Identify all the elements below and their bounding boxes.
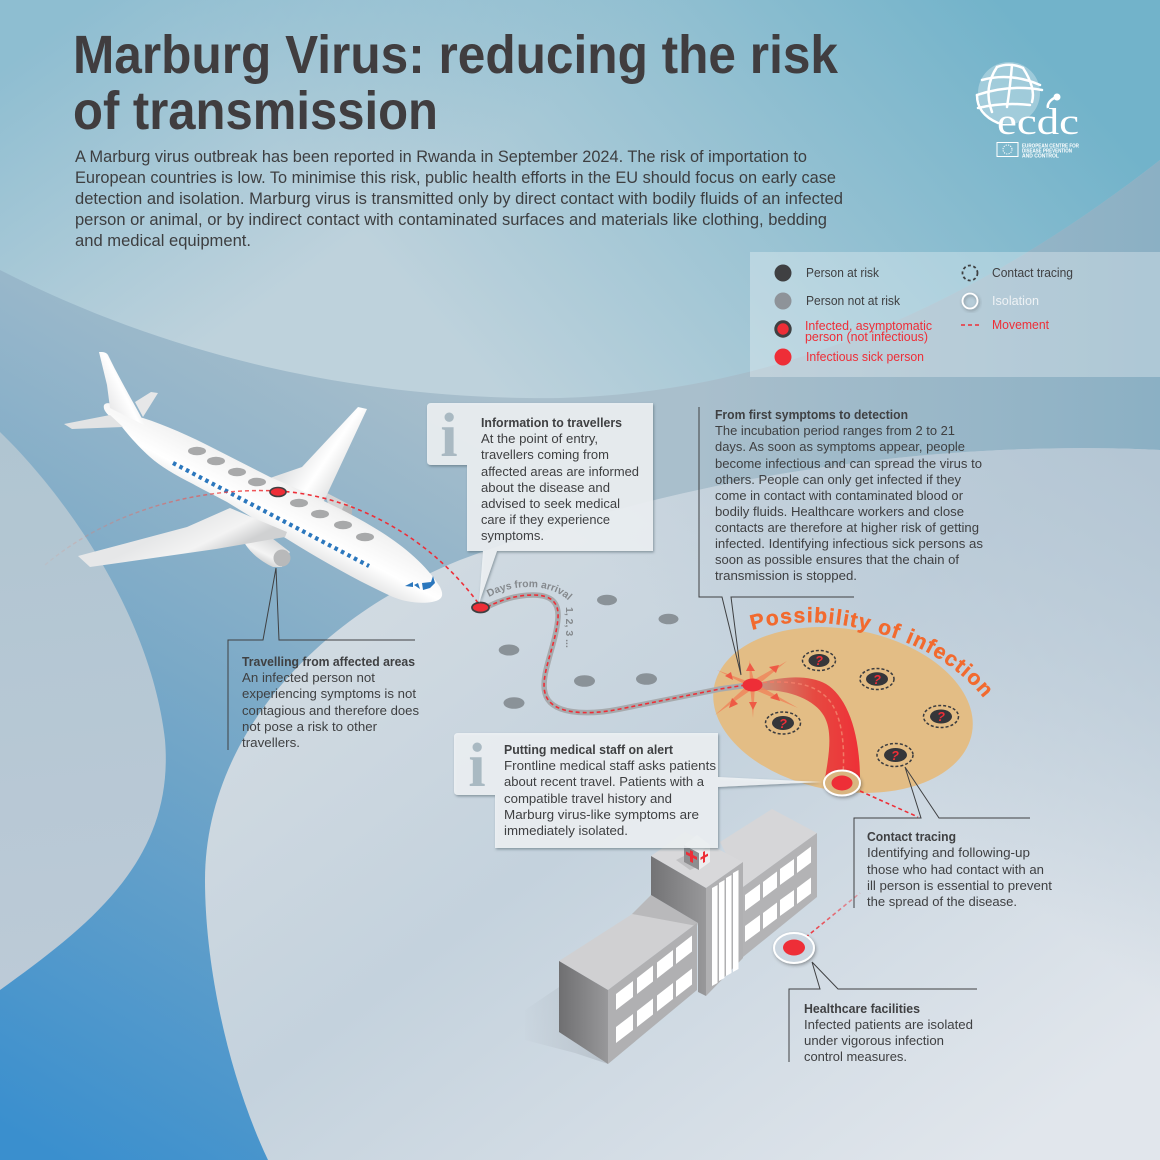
- text: contact tracing: ill person is essential to prevent: [867, 879, 1053, 893]
- text: healthcare facilities: control measures.: [804, 1050, 907, 1064]
- icon: info: i: [468, 732, 486, 800]
- text: information: At the point of entry,: [481, 432, 598, 446]
- text: from first symptoms to detection: bodily fluids. Healthcare workers and close: [715, 505, 964, 519]
- text: healthcare facilities: Healthcare facilities: [804, 1002, 920, 1016]
- text: from first symptoms to detection: The incubation period ranges from 2 to 21: [715, 424, 955, 438]
- fuselage: [104, 403, 442, 603]
- ecdc logo: EUROPEAN CENTRE FOR: [1022, 144, 1079, 150]
- right stabiliser: [135, 392, 158, 417]
- label: days from arrival: Days from arrival: [486, 580, 573, 600]
- text: from first symptoms to detection: [715, 408, 983, 583]
- text: healthcare facilities: [804, 1002, 973, 1064]
- text: healthcare facilities: under vigorous infection: [804, 1034, 944, 1048]
- contact: [924, 706, 958, 728]
- ecdc logo: ecdc: [997, 102, 1079, 143]
- movement line to hospital: [800, 893, 860, 942]
- flight path faded: [45, 491, 278, 565]
- legend: contact tracing: Contact tracing: [992, 266, 1073, 280]
- icon: info: i: [440, 402, 458, 470]
- upper engine: [325, 492, 352, 520]
- grey people not at risk: [499, 595, 678, 709]
- left stabiliser: [64, 415, 123, 429]
- text: travelling from affected areas: contagious and therefore does: [242, 704, 419, 718]
- text: from first symptoms to detection: From first symptoms to detection: [715, 408, 908, 422]
- tower strips: [712, 870, 738, 986]
- title: Marburg Virus: reducing the risk: [73, 25, 839, 85]
- legend: movement: [961, 318, 1049, 332]
- text: from first symptoms to detection: infected. Identifying infectious sick persons as: [715, 537, 983, 551]
- text: information: travellers coming from: [481, 448, 609, 462]
- text: putting medical staff: Putting medical staff on alert: [504, 743, 674, 757]
- contact: [877, 744, 913, 766]
- legend: person not at risk: [774, 292, 901, 310]
- callout: information to travellers: [427, 402, 653, 603]
- intro text: person or animal, or by indirect contact with contaminated surfaces and materials like clothing, bedding: [75, 211, 827, 229]
- contact: ?: [937, 709, 945, 724]
- text: travelling from affected areas: travellers.: [242, 736, 300, 750]
- text: from first symptoms to detection: come in contact with contaminated blood or: [715, 489, 963, 503]
- flight path to arrival: [278, 491, 481, 607]
- text: travelling from affected areas: An infected person not: [242, 671, 376, 685]
- intro text: European countries is low. To minimise this risk, public health efforts in the EU should focus on early case: [75, 169, 836, 187]
- legend: infected asymptomatic: Infected, asymptomatic: [805, 319, 932, 333]
- ecdc logo: [977, 62, 1079, 160]
- arrow heads: [725, 663, 780, 710]
- contact: [802, 650, 836, 670]
- legend: person at risk: Person at risk: [806, 266, 880, 280]
- text: healthcare facilities: Infected patients are isolated: [804, 1018, 973, 1032]
- text: information: about the disease and: [481, 481, 610, 495]
- lower wing: [78, 508, 287, 567]
- contact: [860, 668, 894, 690]
- legend: infected asymptomatic: [776, 319, 932, 344]
- legend: person at risk: [774, 264, 880, 282]
- isolation ring on tube: [824, 770, 860, 796]
- label: possibility of infection: Possibility of infection: [750, 606, 990, 698]
- windows row: [173, 463, 369, 566]
- ecdc logo: AND CONTROL: [1022, 154, 1059, 160]
- legend: infectious sick person: Infectious sick person: [806, 350, 924, 364]
- text: putting medical staff: immediately isolated.: [504, 824, 628, 838]
- contact: ?: [779, 716, 787, 731]
- leader: travelling: [228, 568, 415, 750]
- text: information: Information to travellers: [481, 416, 622, 430]
- text: information: advised to seek medical: [481, 497, 620, 511]
- dashed route in tube: [756, 682, 844, 775]
- legend: person not at risk: Person not at risk: [806, 294, 901, 308]
- roof hatches: [188, 447, 374, 541]
- contacts at risk: [766, 650, 958, 766]
- label: day numbers: 1, 2, 3 ...: [563, 607, 575, 648]
- text: information: care if they experience: [481, 513, 610, 527]
- hospital isolation ring: [774, 933, 814, 963]
- panel: legend: [750, 252, 1160, 377]
- intro text: A Marburg virus outbreak has been reported in Rwanda in September 2024. The risk of importation to: [75, 148, 807, 166]
- airplane: [64, 352, 442, 603]
- title: of transmission: [73, 81, 438, 141]
- text: travelling from affected areas: [242, 655, 419, 750]
- text: from first symptoms to detection: soon as possible ensures that the chain of: [715, 553, 960, 567]
- legend: infected asymptomatic: person (not infectious): [805, 330, 928, 344]
- leader: contact tracing: [854, 767, 1030, 908]
- tower: [651, 832, 743, 888]
- text: information: affected areas are informed: [481, 465, 639, 479]
- text: travelling from affected areas: not pose a risk to other: [242, 720, 377, 734]
- hospital: [525, 809, 817, 1064]
- intro text: detection and isolation. Marburg virus is transmitted only by direct contact with bodily fluids of an infected: [75, 190, 843, 208]
- right wing: [720, 809, 817, 887]
- contact: ?: [815, 653, 823, 668]
- infected passenger: [270, 488, 286, 496]
- windows right wing: [745, 846, 811, 942]
- text: contact tracing: Contact tracing: [867, 830, 956, 844]
- source case: [742, 678, 762, 692]
- text: putting medical staff: Frontline medical staff asks patients: [504, 759, 716, 773]
- title: [73, 25, 839, 141]
- text: from first symptoms to detection: others. People can only get infected if they: [715, 473, 962, 487]
- lower engine: [244, 535, 290, 567]
- contact: ?: [873, 672, 881, 687]
- legend: isolation: Isolation: [992, 294, 1039, 308]
- contact: [766, 712, 800, 734]
- left wing: [559, 911, 697, 990]
- callout: putting medical staff on alert: [454, 732, 822, 848]
- dashed route: [487, 595, 752, 713]
- tail fin: [99, 352, 146, 426]
- text: from first symptoms to detection: days. As soon as symptoms appear, people: [715, 440, 965, 454]
- upper wing: [270, 407, 367, 505]
- ecdc logo: DISEASE PREVENTION: [1022, 148, 1072, 154]
- legend: infectious sick person: [774, 348, 924, 366]
- text: information: symptoms.: [481, 529, 544, 543]
- leader: first symptoms: [699, 407, 854, 675]
- text: contact tracing: [867, 830, 1053, 909]
- contact tracing movement line: [860, 791, 918, 817]
- text: putting medical staff: compatible travel history and: [504, 792, 672, 806]
- text: contact tracing: those who had contact with an: [867, 863, 1044, 877]
- text: contact tracing: the spread of the disease.: [867, 895, 1017, 909]
- grey travel route: [487, 595, 756, 713]
- text: putting medical staff: [504, 743, 716, 838]
- legend: isolation: [962, 294, 1039, 308]
- contact: ?: [891, 748, 899, 763]
- arrival person: [472, 602, 489, 612]
- red tube: [748, 677, 860, 780]
- red cross sign: [676, 835, 710, 870]
- leader: healthcare: [789, 962, 977, 1062]
- cockpit: [405, 576, 435, 590]
- legend: movement: Movement: [992, 318, 1049, 332]
- text: from first symptoms to detection: transmission is stopped.: [715, 569, 857, 583]
- intro text: [75, 148, 843, 250]
- text: from first symptoms to detection: contacts are therefore at higher risk of getting: [715, 521, 979, 535]
- disc: possibility of infection: [700, 607, 986, 813]
- text: contact tracing: Identifying and following-up: [867, 846, 1030, 860]
- legend: contact tracing: [962, 266, 1073, 280]
- spreading arrows: [715, 660, 798, 718]
- text: putting medical staff: Marburg virus-like symptoms are: [504, 808, 699, 822]
- text: from first symptoms to detection: become infectious and can spread the virus to: [715, 457, 982, 471]
- intro text: and medical equipment.: [75, 232, 251, 250]
- text: travelling from affected areas: experiencing symptoms is not: [242, 687, 417, 701]
- text: putting medical staff: about recent travel. Patients with a: [504, 775, 704, 789]
- text: information: [481, 416, 639, 543]
- text: travelling from affected areas: Travelling from affected areas: [242, 655, 415, 669]
- windows left wing: [616, 936, 692, 1043]
